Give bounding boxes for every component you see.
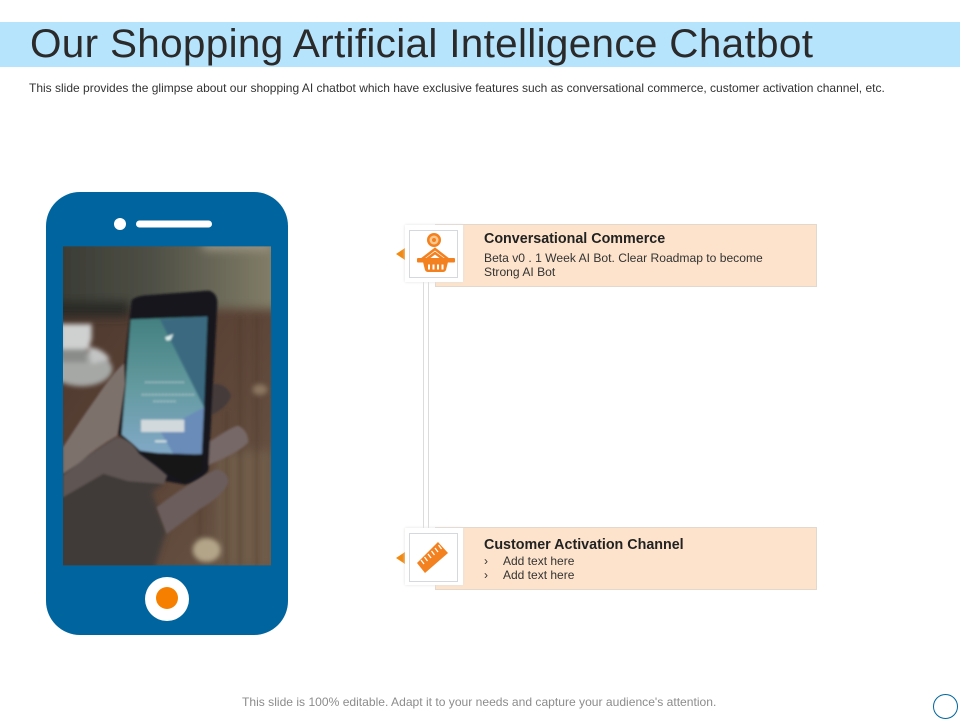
icon: basket with coin — [405, 225, 463, 282]
heading: Conversational Commerce — [484, 231, 665, 247]
phone body — [46, 192, 288, 635]
title: Our Shopping Artificial Intelligence Chatbot — [30, 22, 813, 66]
palm — [63, 472, 168, 566]
subtitle: This slide provides the glimpse about our shopping AI chatbot which have exclusive features such as conversational commerce, customer activation channel, etc. — [29, 81, 885, 95]
panel: customer activation channel — [396, 527, 817, 590]
speaker slot — [136, 220, 212, 228]
photo of hand holding phone — [63, 246, 271, 566]
body text: Beta v0 . 1 Week AI Bot. Clear Roadmap to become — [484, 250, 763, 264]
heading: Customer Activation Channel — [484, 537, 684, 553]
index finger — [63, 363, 125, 474]
bullet list — [484, 554, 574, 582]
ring finger — [157, 469, 228, 534]
icon: ruler — [405, 528, 463, 585]
phone illustration — [46, 192, 288, 635]
camera dot — [114, 218, 126, 230]
coffee saucer — [51, 352, 112, 386]
footer note: This slide is 100% editable. Adapt it to your needs and capture your audience's attention. — [242, 695, 716, 709]
timeline connector — [423, 282, 429, 529]
handset screen — [122, 317, 207, 456]
home button — [145, 577, 189, 621]
title banner — [0, 22, 960, 67]
thumb — [63, 437, 167, 497]
middle finger — [207, 426, 248, 466]
panel: conversational commerce — [396, 224, 817, 287]
panel background — [435, 527, 817, 590]
body text — [484, 250, 763, 278]
panel background — [435, 224, 817, 287]
corner circle badge — [933, 694, 958, 719]
back finger — [210, 384, 231, 416]
arrow — [396, 248, 405, 260]
bullet list: › Add text here — [484, 568, 574, 582]
arrow — [396, 552, 405, 564]
handset — [118, 291, 217, 485]
body text: Strong AI Bot — [484, 264, 555, 278]
bullet list: › Add text here — [484, 554, 574, 568]
